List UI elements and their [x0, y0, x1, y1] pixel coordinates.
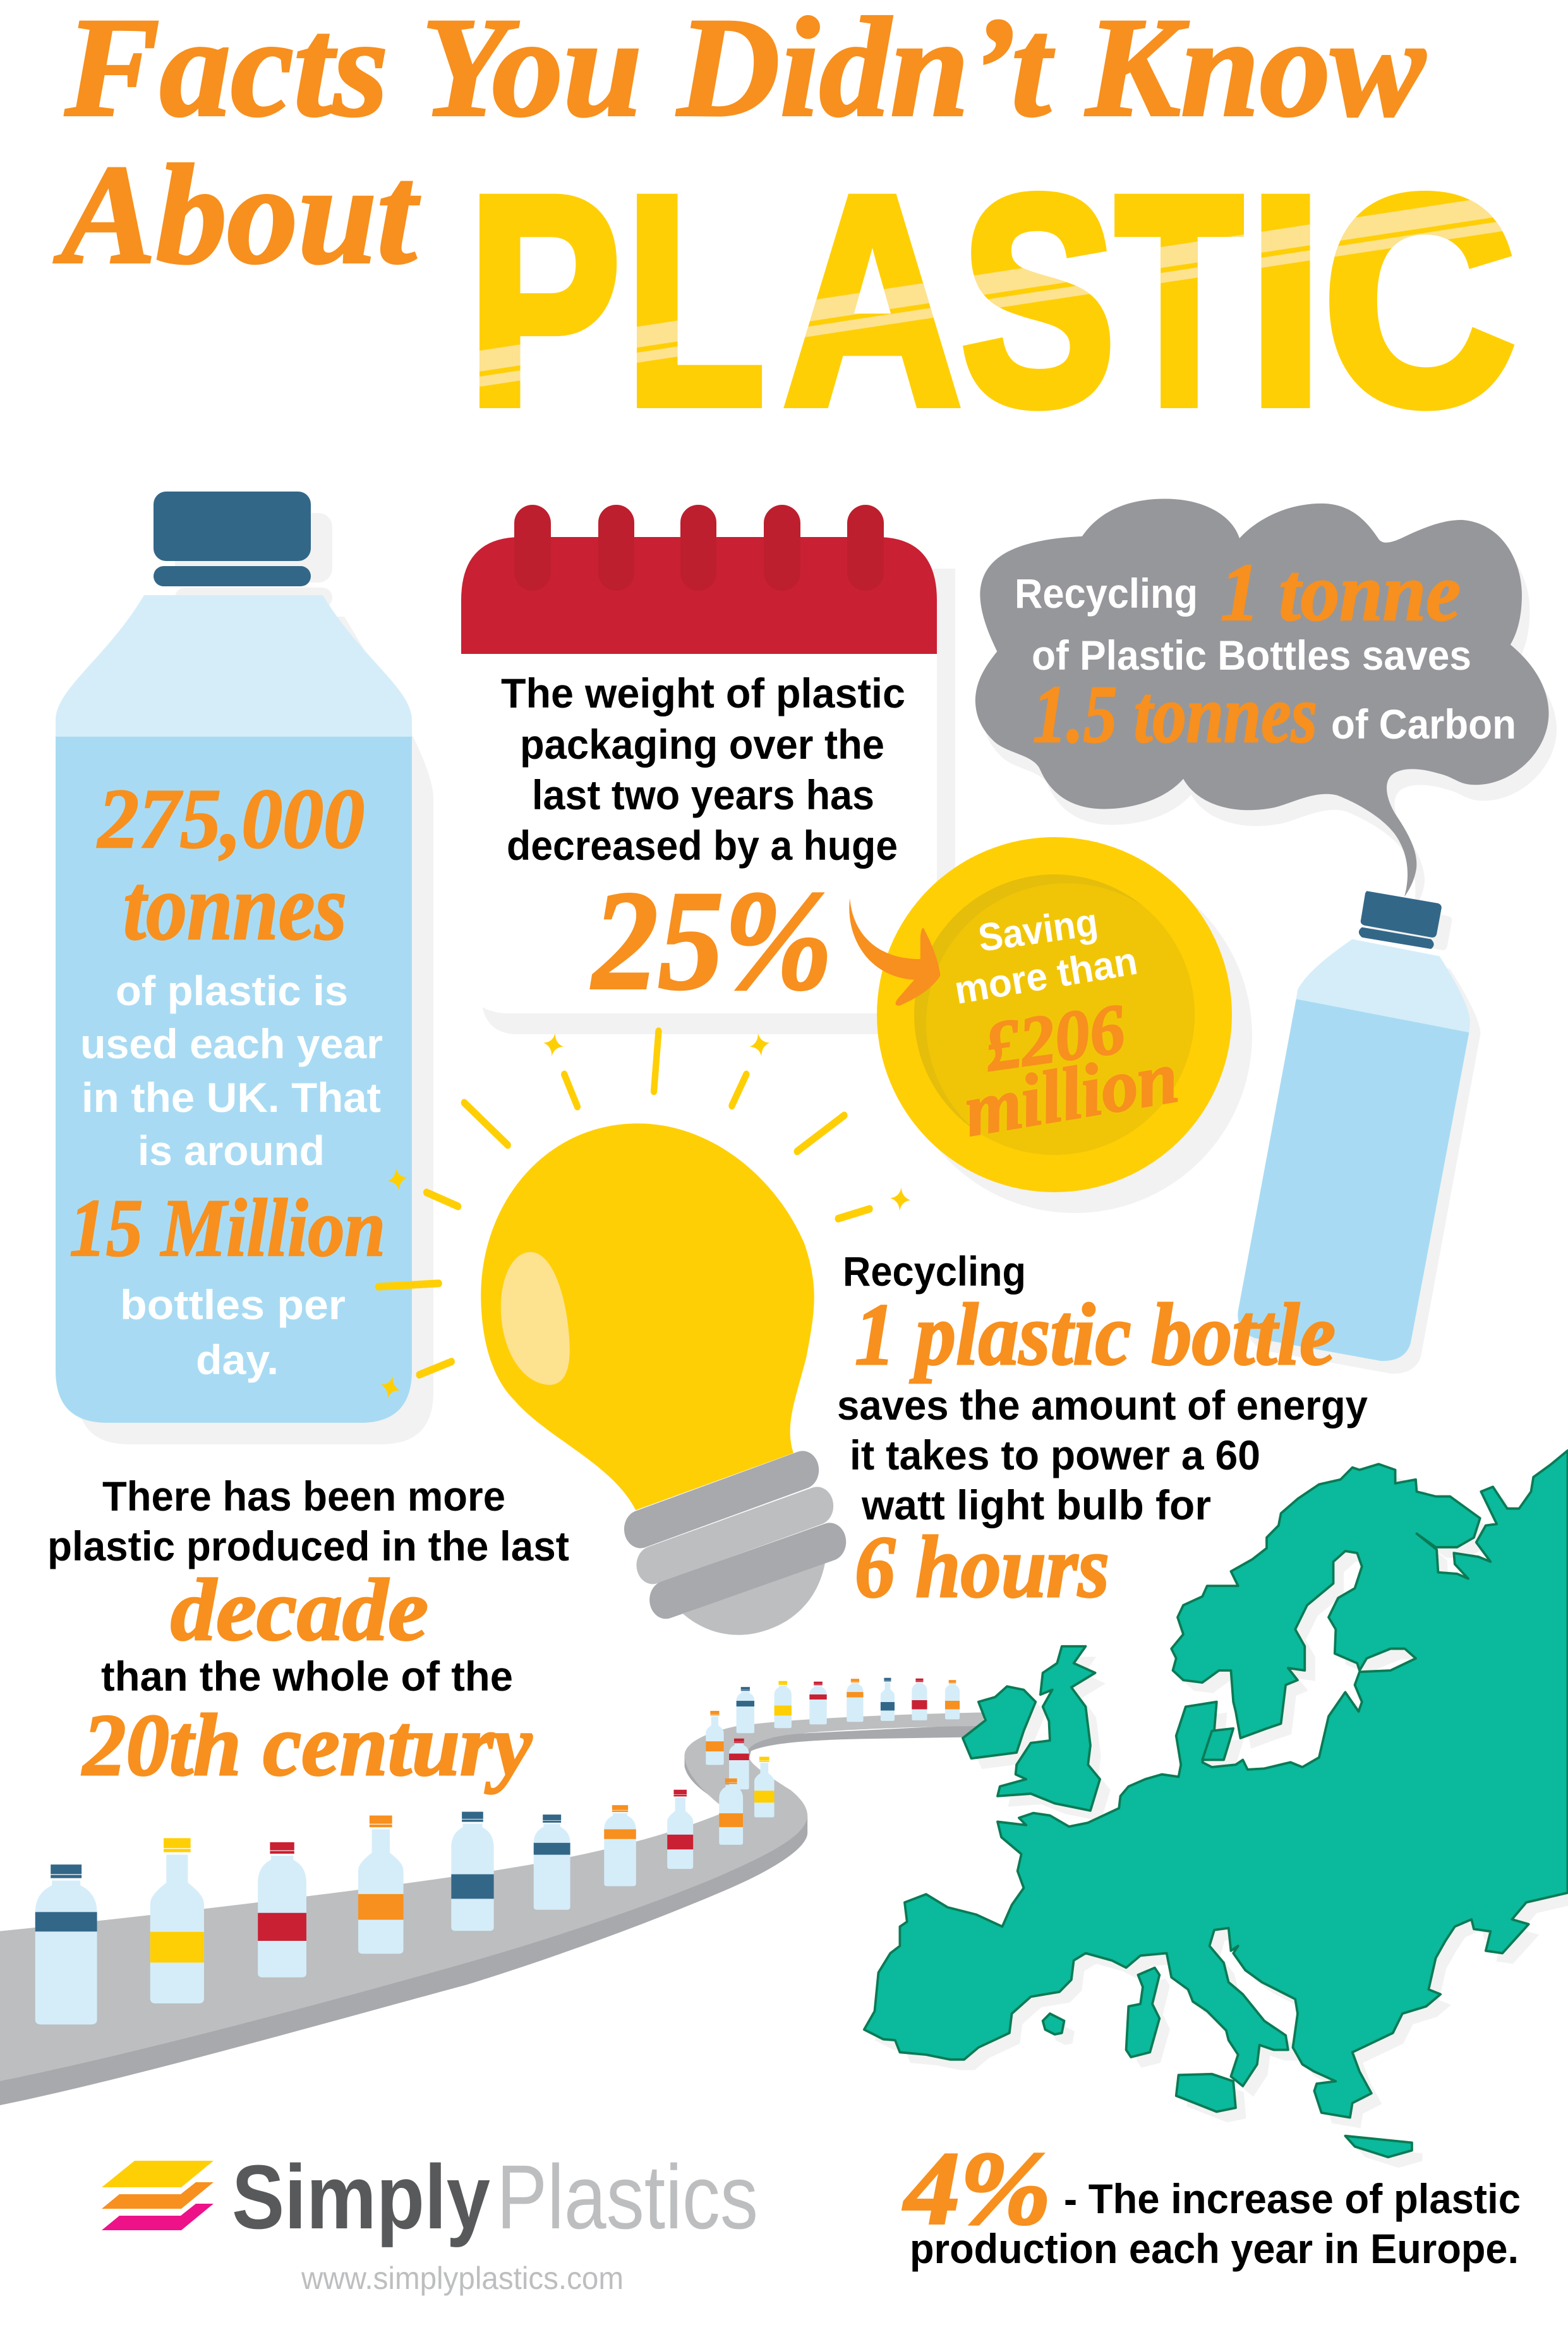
title [54, 0, 1426, 293]
tilted bottle shoulder [1296, 939, 1470, 1032]
title word: PLASTIC: I [1248, 134, 1324, 466]
title word: PLASTIC: A [783, 135, 962, 466]
coin body [877, 837, 1232, 1192]
bottle text [69, 772, 385, 1383]
coin shadow [897, 858, 1252, 1213]
bottle 13 [737, 1687, 754, 1733]
map of Europe [864, 1451, 1568, 2168]
bottle text: of plastic is [116, 967, 348, 1014]
bottle 2 [150, 1838, 204, 2003]
PLASTIC stripes: P [468, 134, 620, 466]
calendar text: The weight of plastic [501, 670, 905, 716]
cloud text [1015, 547, 1516, 760]
bottle 5 [451, 1812, 494, 1931]
panel: carbon cloud [975, 498, 1557, 912]
bottle text: is around [138, 1127, 325, 1174]
bottle text: 15 Million [69, 1183, 385, 1274]
cloud text: Recycling [1015, 570, 1198, 617]
light rays [378, 1031, 870, 1375]
logo wordmark: Plastics [497, 2146, 758, 2248]
text: produced in last decade: There has been more [102, 1473, 505, 1519]
bottle cap [154, 492, 311, 586]
bottle text: tonnes [123, 855, 347, 960]
bottle text: in the UK. That [81, 1074, 381, 1121]
logo [102, 2146, 758, 2296]
bottle 17 [881, 1678, 895, 1721]
bulb highlight [501, 1252, 570, 1385]
text: produced in last decade [47, 1473, 569, 1794]
PLASTIC stripes: L [625, 134, 765, 466]
bottle text: bottles per [120, 1281, 346, 1328]
panel: coin [877, 837, 1252, 1213]
PLASTIC stripes: I [1248, 134, 1324, 466]
calendar text: 25% [591, 861, 833, 1019]
PLASTIC stripes: T [1116, 135, 1243, 466]
calendar text [501, 670, 905, 1019]
bottle 14 [775, 1681, 792, 1728]
bottle 11 [729, 1739, 749, 1789]
cloud text: of Carbon [1331, 701, 1516, 747]
cloud shape [975, 498, 1557, 912]
PLASTIC stripes [479, 200, 1502, 387]
bottle 9 [719, 1778, 743, 1845]
coin text [951, 900, 1184, 1152]
coin text: Saving [975, 900, 1101, 960]
bottle shadow [77, 513, 433, 1444]
text: recycling one bottle: 6 hours [855, 1518, 1109, 1616]
calendar rings [514, 505, 884, 591]
bottle 16 [847, 1679, 864, 1722]
stat: 4 percent: - The increase of plastic [1064, 2175, 1521, 2222]
bottle text: 275,000 [97, 772, 365, 866]
road surface [0, 1712, 984, 2081]
title word: PLASTIC: L [625, 134, 765, 466]
bulb screw base [641, 1470, 829, 1600]
road side [0, 1724, 984, 2105]
calendar text: packaging over the [520, 721, 884, 768]
text: produced in last decade: 20th century [81, 1696, 533, 1794]
text: produced in last decade: than the whole of the [101, 1653, 513, 1700]
map shadow [874, 1461, 1568, 2168]
logo wordmark: Simply [232, 2146, 490, 2248]
text: recycling one bottle: Recycling [843, 1248, 1026, 1295]
text: recycling one bottle: saves the amount of energy [837, 1382, 1368, 1428]
cloud text: 1 tonne [1221, 547, 1461, 638]
PLASTIC stripes: S [961, 135, 1116, 466]
arrow to coin [849, 898, 940, 1006]
title word: PLASTIC: C [1323, 134, 1516, 466]
title word: PLASTIC: T [1116, 135, 1243, 466]
winding road with bottles [0, 1678, 984, 2105]
tilted bottle shadow [1248, 903, 1481, 1374]
panel: light bulb [378, 1031, 912, 1635]
calendar shadow [482, 569, 955, 1034]
map land [864, 1451, 1568, 2157]
bottle 4 [358, 1816, 404, 1954]
stat: 4 percent [903, 2130, 1521, 2272]
coin text: million [958, 1035, 1184, 1152]
logo mark [102, 2161, 214, 2230]
coin text: more than [951, 939, 1140, 1013]
calendar text: last two years has [532, 771, 874, 818]
panel: calendar [461, 505, 955, 1034]
bottle 12 [706, 1711, 724, 1765]
title line 2: About [54, 135, 420, 293]
bottle 6 [534, 1815, 570, 1910]
calendar header [461, 537, 937, 654]
panel: left bottle [56, 492, 433, 1444]
text: produced in last decade: plastic produced in the last [47, 1523, 569, 1569]
stat: 4 percent: production each year in Europe. [910, 2225, 1519, 2272]
bottle water [56, 737, 412, 1423]
text: recycling one bottle: 1 plastic bottle [855, 1286, 1336, 1384]
tilted bottle water [1238, 999, 1469, 1361]
text: recycling one bottle: it takes to power a 60 [850, 1432, 1260, 1478]
bottle 15 [809, 1682, 827, 1724]
coin inner [914, 874, 1195, 1155]
bottle text: used each year [80, 1020, 383, 1067]
PLASTIC stripes: C [1323, 134, 1516, 466]
bottle 7 [604, 1805, 636, 1886]
panel: right tilted bottle [1238, 891, 1481, 1374]
bulb glass [481, 1123, 814, 1510]
title word: PLASTIC [468, 134, 1516, 466]
logo wordmark [232, 2146, 758, 2248]
bottle 10 [754, 1757, 775, 1818]
title word: PLASTIC: P [468, 134, 620, 466]
text: recycling one bottle: watt light bulb for [861, 1482, 1211, 1528]
bottle 18 [912, 1679, 927, 1720]
text: produced in last decade: decade [171, 1561, 428, 1659]
cloud text: 1.5 tonnes [1033, 669, 1317, 760]
title word: PLASTIC: S [961, 135, 1116, 466]
bottle 8 [667, 1790, 693, 1869]
calendar text: decreased by a huge [507, 822, 898, 869]
bottle 19 [945, 1680, 960, 1719]
sparkles [378, 1031, 912, 1402]
stat: 4 percent: 4% [903, 2130, 1051, 2246]
bottle shoulder [56, 595, 412, 739]
bulb tip [683, 1561, 826, 1635]
bottle 3 [258, 1842, 306, 1978]
bottle text: day. [196, 1336, 279, 1383]
bottle 1 [35, 1864, 97, 2024]
tilted bottle cap [1359, 891, 1442, 949]
text: recycling one bottle [837, 1248, 1368, 1616]
cloud text: of Plastic Bottles saves [1032, 632, 1471, 679]
website: www.simplyplastics.com [301, 2261, 624, 2296]
PLASTIC stripes: A [783, 135, 962, 466]
coin text: £206 [979, 989, 1130, 1087]
calendar page [461, 632, 937, 1013]
